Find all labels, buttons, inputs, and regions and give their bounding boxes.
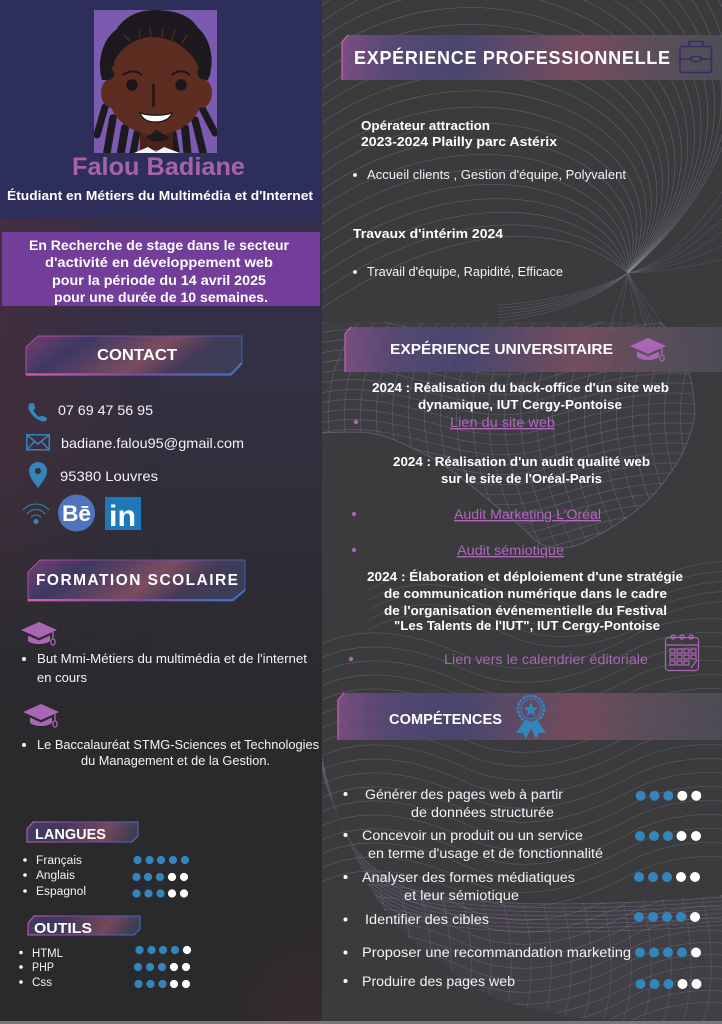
rating: skill 6 [636, 979, 702, 989]
heading: expérience professionnelle [342, 35, 722, 80]
phone number: 07 69 47 56 95 [58, 402, 153, 418]
skill: analyser: Analyser des formes médiatiques [362, 870, 575, 885]
formation item: Baccalauréat: du Management et de la Gestion. [81, 754, 270, 768]
avatar illustration [94, 10, 217, 158]
rating: skill 3 [634, 872, 700, 882]
rating: skill 4 [634, 912, 700, 922]
subtitle: Étudiant en Métiers du Multimédia et d'Internet [7, 188, 314, 203]
panel: projet back-office: Lien du site web [450, 415, 555, 430]
formation item: BUT MMI: en cours [37, 671, 87, 685]
panel: languages list: Espagnol [36, 886, 86, 898]
panel: job intérim [353, 227, 563, 279]
panel: formation list [21, 622, 319, 768]
panel: projet stratégie: de communication numérique dans le cadre [384, 587, 667, 601]
icon: Behance [58, 494, 95, 532]
panel: left sidebar background [0, 0, 322, 1024]
icon: calendar [666, 635, 698, 670]
panel: job Astérix: Opérateur attraction [361, 119, 490, 133]
formation item: BUT MMI: But Mmi-Métiers du multimédia et de l'internet [37, 652, 308, 666]
heading: compétences [338, 693, 722, 740]
heading: langues [27, 822, 138, 843]
panel: projet back-office [354, 381, 669, 430]
icon: phone [28, 403, 47, 422]
panel: projet stratégie [349, 569, 683, 667]
rating: skill 2 [635, 831, 701, 841]
skill: pages web: Produire des pages web [362, 974, 515, 989]
rating: PHP [134, 963, 190, 971]
icon: Behance: Bē [62, 501, 91, 526]
panel: job Astérix [353, 119, 626, 182]
callout: internship search: pour la période du 14 avril 2025 [52, 273, 267, 288]
heading: formation scolaire [28, 560, 245, 601]
panel: job Astérix: Accueil clients , Gestion d'équipe, Polyvalent [367, 167, 626, 182]
skill: recommandation: Proposer une recommandation marketing [362, 945, 631, 960]
icon: location pin [29, 462, 47, 488]
icon: graduation cap 1 [21, 622, 57, 645]
panel: languages list [23, 855, 189, 898]
formation item: Baccalauréat [22, 738, 319, 768]
skill: analyser: et leur sémiotique [404, 888, 519, 903]
callout: internship search [2, 232, 320, 306]
skill: pages web structurées: Générer des pages web à partir [365, 787, 564, 802]
panel: job Astérix: 2023-2024 Plailly parc Astérix [361, 135, 557, 149]
panel: job intérim: Travail d'équipe, Rapidité, Efficace [367, 264, 563, 279]
panel: languages list: Anglais [36, 870, 75, 882]
icon: ribbon award [516, 696, 546, 739]
skill: pages web structurées [344, 787, 564, 820]
heading: outils [28, 916, 140, 937]
panel: projet stratégie: Lien vers le calendrier éditoriale [444, 652, 648, 667]
icon: envelope [27, 435, 49, 450]
panel: tools list: PHP [32, 962, 54, 974]
icon: LinkedIn [105, 497, 141, 533]
skill: concevoir: Concevoir un produit ou un service [362, 828, 583, 843]
icon: graduation cap 2 [23, 704, 59, 727]
icon: wifi [23, 504, 49, 524]
heading: expérience universitaire: EXPÉRIENCE UNIVERSITAIRE [390, 341, 613, 358]
panel: tools list [19, 946, 191, 989]
formation item: Baccalauréat: Le Baccalauréat STMG-Sciences et Technologies [37, 738, 319, 752]
city: 95380 Louvres [60, 468, 158, 484]
callout: internship search: d'activité en développement web [45, 255, 273, 270]
panel: job intérim: Travaux d'intérim 2024 [353, 227, 503, 241]
heading: contact [26, 336, 242, 375]
panel: projet stratégie: "Les Talents de l'IUT", IUT Cergy-Pontoise [394, 619, 660, 633]
panel: projet audit: 2024 : Réalisation d'un audit qualité web [393, 455, 650, 469]
heading: formation scolaire: FORMATION SCOLAIRE [36, 572, 238, 589]
icon: LinkedIn: in [109, 500, 136, 533]
icon: graduation cap [630, 338, 666, 361]
heading: langues: LANGUES [35, 826, 106, 843]
rating: HTML [135, 946, 191, 954]
panel: projet audit [352, 455, 650, 558]
skill: concevoir [344, 828, 603, 861]
panel: projet audit: Audit Marketing L'Oréal [454, 507, 601, 522]
skill: analyser [344, 870, 575, 903]
panel: projet stratégie: 2024 : Élaboration et déploiement d'une stratégie [367, 569, 683, 584]
panel: projet back-office: 2024 : Réalisation du back-office d'un site web [372, 381, 669, 395]
rating: Français [133, 856, 189, 864]
rating: skill 1 [636, 791, 701, 801]
panel: right background with wave line pattern [322, 0, 722, 1024]
panel: projet back-office: dynamique, IUT Cergy-Pontoise [418, 398, 622, 412]
heading: outils: OUTILS [34, 920, 92, 937]
panel: tools list: Css [32, 977, 52, 989]
rating: Espagnol [132, 889, 188, 898]
heading: contact: CONTACT [97, 347, 178, 364]
panel: projet stratégie: de l'organisation événementielle du Festival [384, 604, 667, 618]
panel: languages list: Français [36, 855, 82, 867]
rating: Anglais [132, 873, 188, 881]
formation item: BUT MMI [22, 652, 308, 685]
skill: pages web structurées: de données structurée [411, 805, 554, 820]
callout: internship search: En Recherche de stage dans le secteur [29, 238, 290, 253]
name heading: Falou Badiane [72, 153, 245, 181]
icon: briefcase [680, 42, 712, 72]
skill: cibles: Identifier des cibles [365, 912, 489, 927]
panel: compétences list [344, 787, 702, 989]
panel: projet audit: Audit sémiotique [457, 543, 564, 558]
panel: projet audit: sur le site de l'Oréal-Paris [441, 472, 602, 486]
heading: expérience universitaire [345, 327, 722, 372]
panel: contact details [23, 402, 244, 533]
heading: expérience professionnelle: EXPÉRIENCE PROFESSIONNELLE [354, 47, 670, 68]
panel: tools list: HTML [32, 948, 64, 960]
rating: Css [134, 980, 190, 988]
skill: concevoir: en terme d'usage et de fonctionnalité [368, 846, 603, 861]
callout: internship search: pour une durée de 10 semaines. [54, 290, 268, 305]
rating: skill 5 [635, 948, 701, 958]
heading: compétences: COMPÉTENCES [389, 711, 502, 728]
email address: badiane.falou95@gmail.com [61, 435, 244, 451]
